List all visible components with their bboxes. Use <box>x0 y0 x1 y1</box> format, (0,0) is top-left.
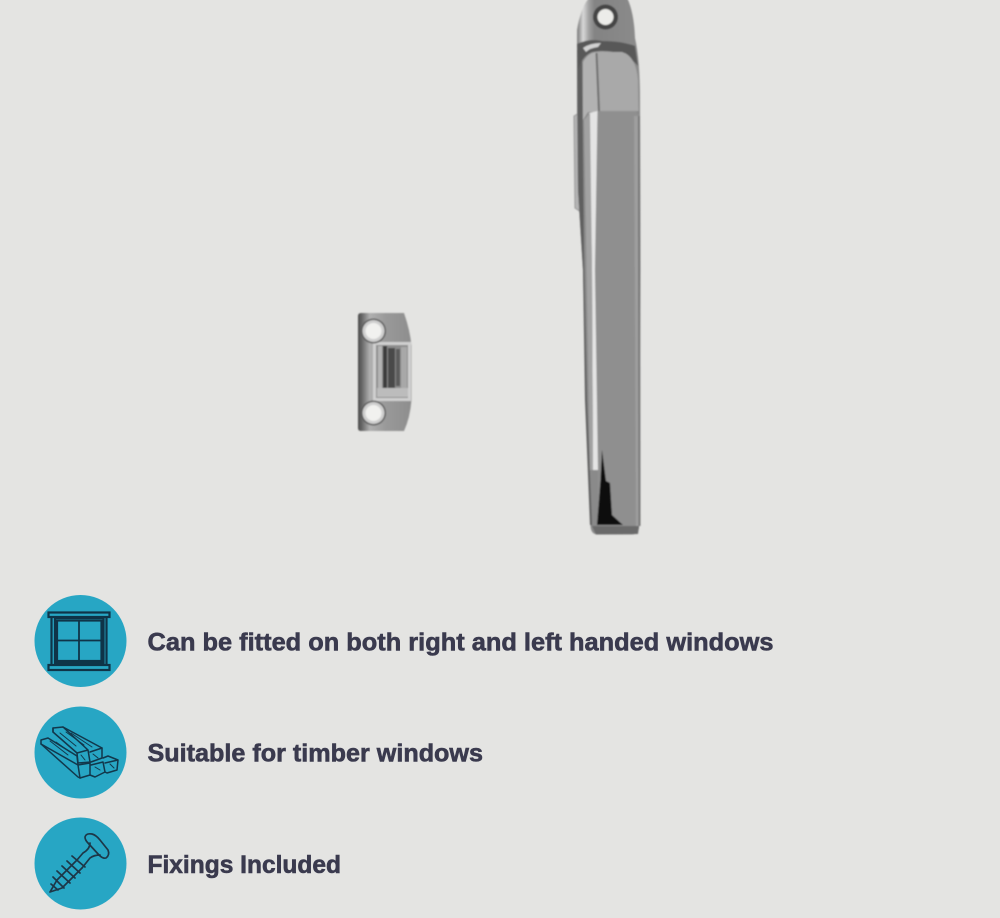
text: fixings included: Fixings Included <box>148 851 341 879</box>
window handle <box>574 0 640 534</box>
icon: screw <box>34 818 126 910</box>
icon: timber <box>34 706 126 798</box>
text: fitted on both hands: Can be fitted on both right and left handed windows <box>148 628 774 656</box>
icon: window <box>34 595 126 687</box>
text: timber windows: Suitable for timber windows <box>148 739 483 767</box>
window keep <box>358 313 412 431</box>
